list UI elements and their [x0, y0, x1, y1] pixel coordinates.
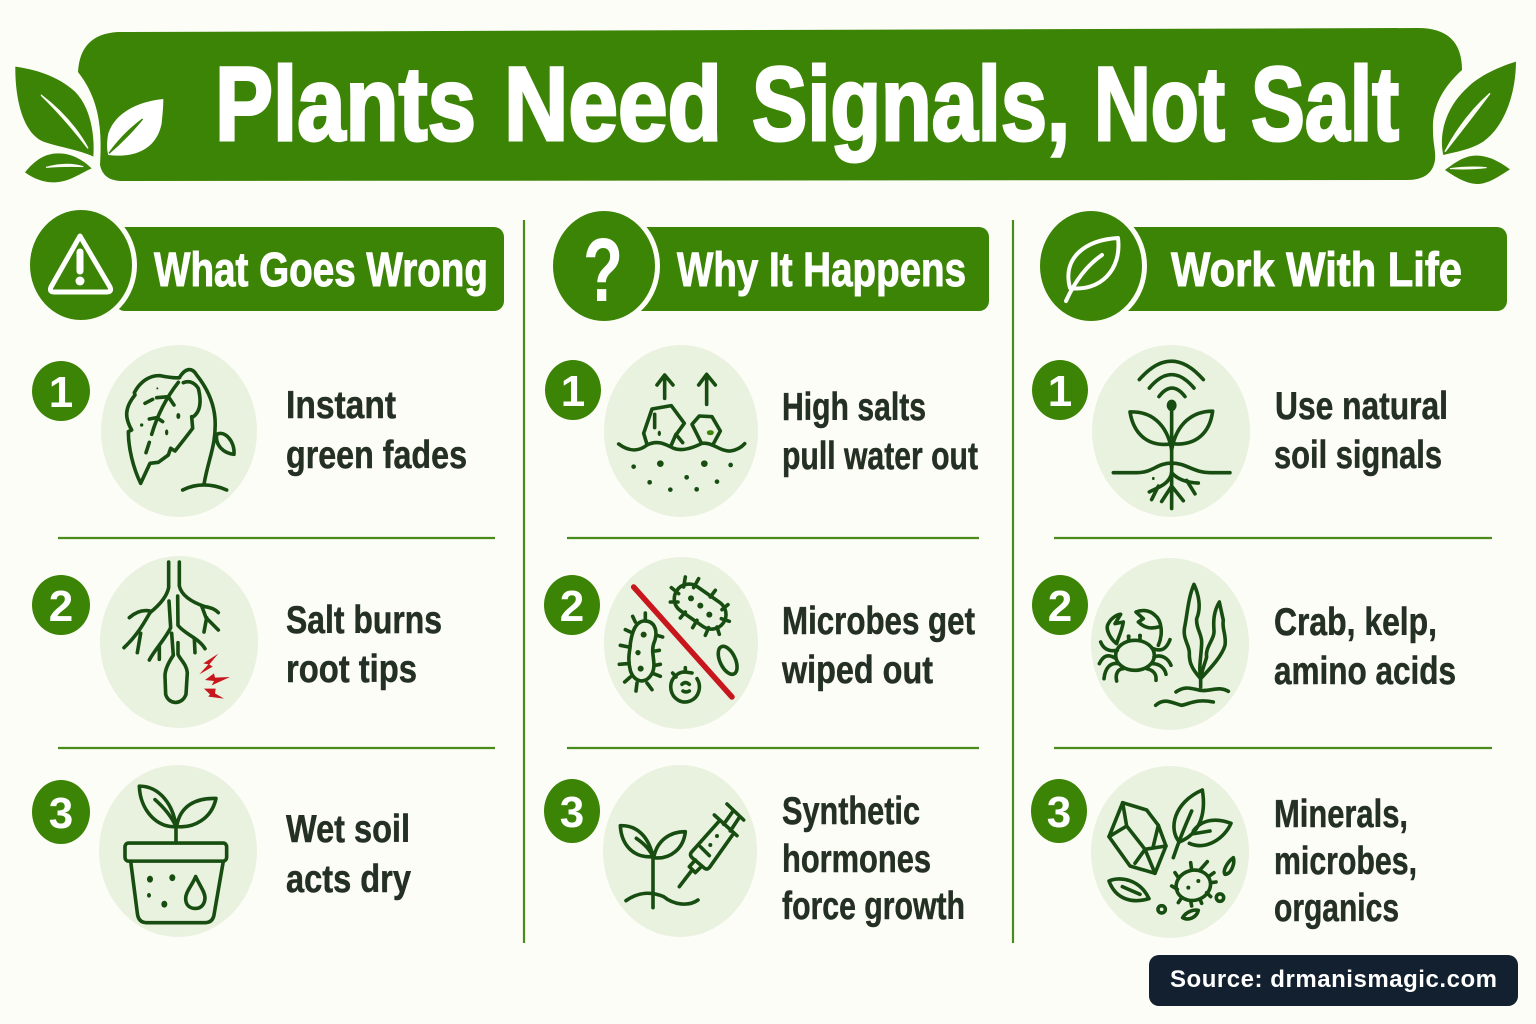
item: synthetic hormones force growth: Synthetic: [782, 790, 920, 833]
item: synthetic hormones force growth: force growth: [782, 885, 965, 928]
title text: Need: [504, 46, 722, 163]
item: microbes get wiped out: [544, 557, 975, 729]
title text: [215, 46, 1399, 163]
title text: Plants: [215, 46, 476, 163]
item: salt burns root tips: root tips: [286, 648, 417, 691]
item: microbes get wiped out: Microbes get: [782, 600, 975, 643]
icon: potted sprout: [125, 786, 227, 923]
item: crab kelp amino acids: amino acids: [1274, 650, 1456, 693]
item: salt burns root tips: [32, 556, 442, 728]
item: wet soil acts dry: [32, 765, 411, 937]
icon: sprout and syringe: [620, 804, 744, 908]
panel: why it happens: [544, 206, 989, 937]
item: use natural soil signals: [1032, 345, 1448, 517]
item: instant green fades: Instant: [286, 384, 396, 427]
item: instant green fades: [32, 345, 467, 517]
item: wet soil acts dry: 3: [49, 789, 73, 838]
item: crab kelp amino acids: 2: [1048, 582, 1072, 631]
item: minerals microbes organics: microbes,: [1274, 840, 1417, 883]
item: high salts pull water out: High salts: [782, 386, 926, 429]
item: minerals microbes organics: [1031, 766, 1417, 938]
icon: plant emitting signals: [1113, 361, 1230, 508]
item: use natural soil signals: 1: [1048, 367, 1072, 416]
item: instant green fades: green fades: [286, 434, 467, 477]
title text: Not: [1094, 46, 1225, 163]
item: crab kelp amino acids: Crab, kelp,: [1274, 601, 1437, 644]
source badge: Source: drmanismagic.com: [1170, 966, 1497, 993]
title text: Salt: [1251, 46, 1399, 163]
item: minerals microbes organics: 3: [1047, 788, 1071, 837]
column divider left: [523, 220, 525, 943]
item: synthetic hormones force growth: hormones: [782, 838, 931, 881]
item: wet soil acts dry: Wet soil: [286, 808, 410, 851]
item: crab kelp amino acids: [1032, 558, 1456, 730]
heading: why it happens: ?: [583, 221, 623, 321]
icon: crossed-out microbes: [619, 577, 741, 702]
item: microbes get wiped out: wiped out: [781, 649, 933, 692]
item: salt burns root tips: 2: [49, 582, 73, 631]
title banner: [78, 28, 1462, 181]
heading: what goes wrong: [25, 205, 504, 325]
item: synthetic hormones force growth: 3: [560, 788, 584, 837]
item: use natural soil signals: soil signals: [1274, 434, 1442, 477]
item: microbes get wiped out: 2: [560, 582, 584, 631]
item: high salts pull water out: 1: [561, 367, 585, 416]
item: wet soil acts dry: acts dry: [286, 858, 411, 901]
item: minerals microbes organics: organics: [1274, 887, 1399, 930]
heading: work with life: Work With Life: [1171, 244, 1462, 297]
item: salt burns root tips: Salt burns: [286, 599, 442, 642]
icon: crystal, leaves and microbe: [1109, 790, 1234, 919]
icon: salt crystals on soil: [619, 374, 745, 492]
source badge: [1149, 955, 1518, 1006]
panel: work with life: [1031, 206, 1507, 938]
item: instant green fades: 1: [49, 368, 73, 417]
item: high salts pull water out: [545, 345, 978, 517]
column divider right: [1012, 220, 1014, 943]
icon: right leaf cluster: [1442, 62, 1516, 184]
heading: why it happens: [548, 206, 989, 326]
item: high salts pull water out: pull water out: [782, 435, 978, 478]
item: use natural soil signals: Use natural: [1275, 385, 1448, 428]
icon: burned root: [124, 562, 230, 702]
icon: left leaf cluster: [15, 67, 163, 182]
title text: Signals,: [752, 46, 1070, 163]
item: synthetic hormones force growth: [544, 765, 965, 937]
item: minerals microbes organics: Minerals,: [1274, 793, 1408, 836]
heading: why it happens: Why It Happens: [677, 244, 966, 297]
icon: crab and kelp: [1099, 584, 1228, 705]
panel: what goes wrong: [25, 205, 504, 937]
heading: what goes wrong: What Goes Wrong: [154, 244, 488, 297]
icon: wilting leaf: [127, 370, 234, 490]
heading: work with life: [1035, 206, 1507, 326]
